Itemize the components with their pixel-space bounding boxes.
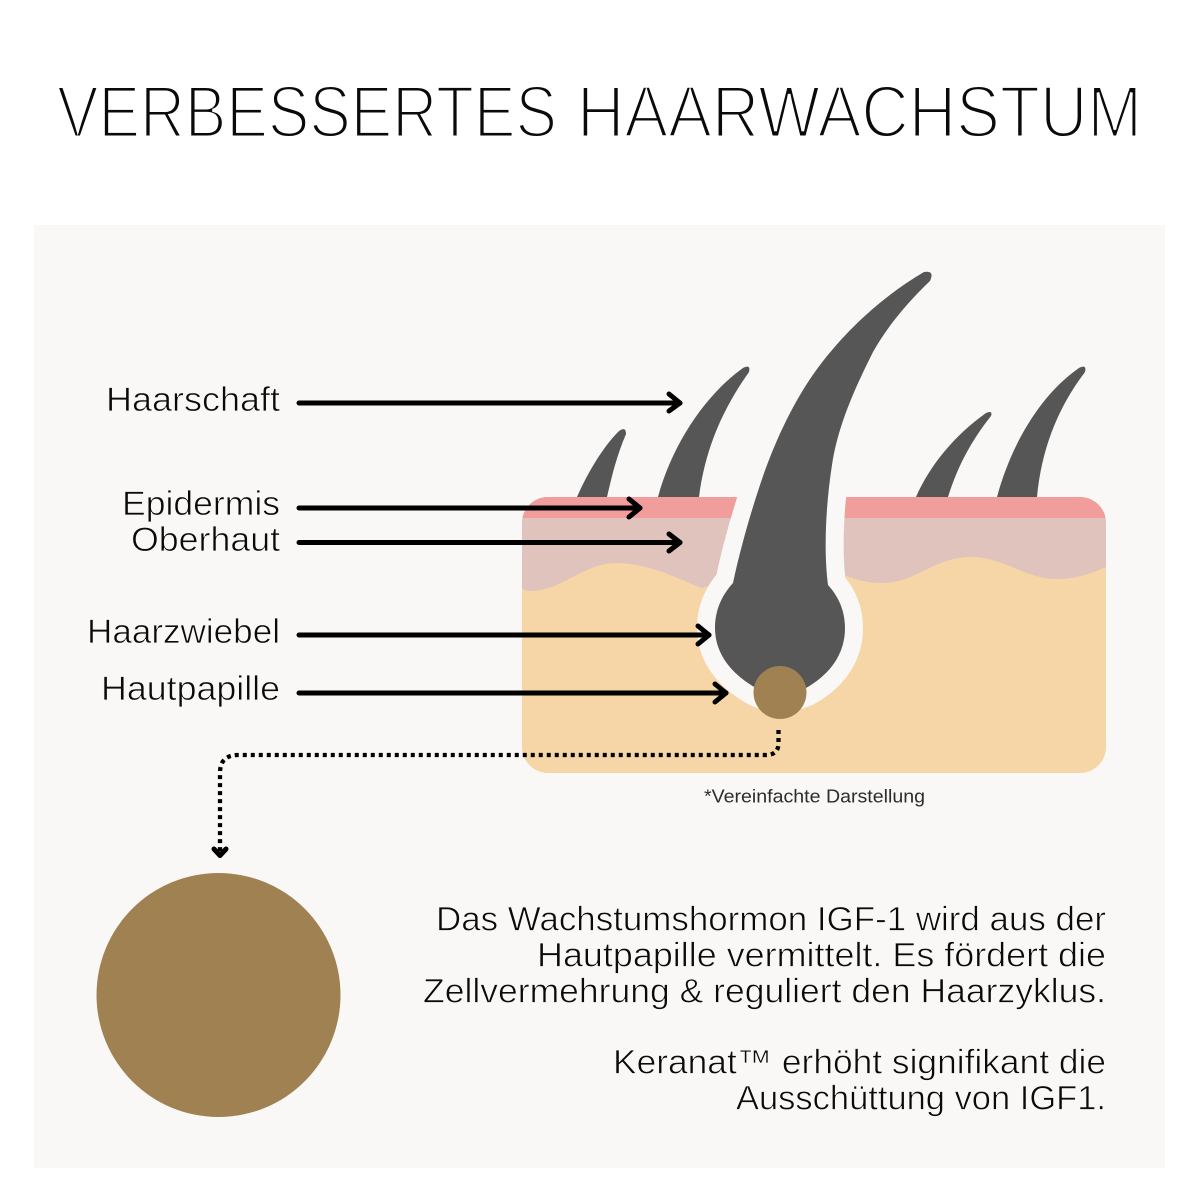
panel: background <box>34 225 1165 1168</box>
arrow: Oberhaut <box>299 534 680 551</box>
label: Haarzwiebel: Haarzwiebel <box>87 613 280 651</box>
text block: explanation: Das Wachstumshormon IGF-1 wird aus der <box>436 900 1106 938</box>
hair 4 <box>916 412 991 497</box>
arrow: Epidermis <box>299 499 640 517</box>
arrow: Hautpapille <box>299 684 726 702</box>
main hair with bulb <box>715 272 932 694</box>
skin layer: subcutis <box>522 497 1106 773</box>
skin layer: epidermis <box>522 497 1106 518</box>
text block: explanation <box>423 900 1106 1118</box>
footnote: *Vereinfachte Darstellung <box>704 786 925 806</box>
arrow: Haarzwiebel <box>299 626 709 644</box>
text block: explanation: Ausschüttung von IGF1. <box>736 1080 1106 1118</box>
label: Haarschaft: Haarschaft <box>106 381 281 419</box>
dermal papilla <box>754 666 806 719</box>
title: HAARWACHSTUM <box>577 72 1142 153</box>
title <box>57 72 1142 153</box>
text block: explanation: Zellvermehrung & reguliert den Haarzyklus. <box>423 972 1106 1010</box>
diagram: skin cross-section <box>522 497 1106 773</box>
hair 2 <box>658 367 749 497</box>
skin layer: dermis <box>522 497 1106 591</box>
dotted arrow: papilla to enlarged circle <box>214 730 778 856</box>
label: Oberhaut: Oberhaut <box>131 521 281 559</box>
text block: explanation: Keranat™ erhöht signifikant die <box>613 1044 1106 1082</box>
label: Hautpapille: Hautpapille <box>101 670 280 708</box>
label: Epidermis: Epidermis <box>122 485 280 523</box>
arrow: Haarschaft <box>299 394 680 411</box>
small hairs <box>577 367 1085 497</box>
title: VERBESSERTES <box>57 72 557 153</box>
hair 1 <box>577 429 626 497</box>
follicle halo around main hair <box>715 272 932 694</box>
enlarged papilla circle <box>96 873 340 1117</box>
hair 5 <box>997 367 1085 497</box>
text block: explanation: Hautpapille vermittelt. Es fördert die <box>537 936 1106 974</box>
